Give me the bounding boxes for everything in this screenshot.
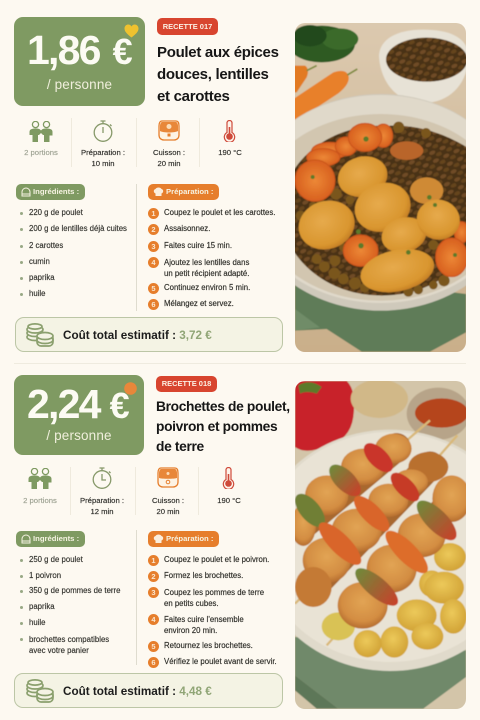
recipe title: et carottes [157, 88, 230, 105]
ingredient: 1 poivron [29, 571, 61, 580]
icon: air fryer [157, 467, 179, 488]
step 3 [148, 240, 232, 252]
step 3: Faites cuire 15 min. [164, 240, 232, 250]
step 4: un petit récipient adapté. [164, 268, 249, 278]
step 1 [148, 555, 282, 566]
ingredient: paprika [29, 602, 55, 611]
ingredient: cumin [29, 257, 50, 266]
ingredient: huile [29, 618, 45, 627]
ingredients heading [16, 184, 85, 200]
total cost text: Coût total estimatif : 4,48 € [63, 685, 212, 698]
herb flecks [311, 136, 457, 257]
recipe title: Brochettes de poulet, [156, 399, 290, 414]
step 4: Ajoutez les lentilles dans [164, 258, 249, 266]
stat: preparation: Préparation : [81, 148, 125, 157]
skewer sticks [295, 420, 457, 645]
ingredient [29, 635, 109, 655]
total cost bar [14, 673, 283, 708]
recipe title: Poulet aux épices [157, 44, 279, 61]
stats row [24, 118, 242, 168]
parsley [288, 25, 358, 62]
step 6 [148, 298, 234, 310]
recipe title: poivron et pommes [156, 419, 277, 434]
stat: cooking [153, 148, 185, 168]
step 5: Continuez environ 5 min. [164, 282, 250, 292]
preparation panel [148, 184, 275, 310]
step 6 [148, 657, 282, 668]
preparation panel [148, 531, 277, 668]
step 3: 3 [151, 588, 156, 597]
stat: portions: 2 portions [24, 148, 58, 157]
recipe title [157, 44, 279, 105]
skewer shadow bands [303, 447, 453, 605]
step 6: 6 [151, 658, 156, 667]
step 4 [148, 257, 250, 278]
napkin [295, 272, 466, 352]
step 2: Assaisonnez. [164, 224, 210, 233]
step 2: 2 [151, 572, 156, 581]
small lentil bowl [379, 30, 468, 103]
price unit: / personne [47, 77, 112, 92]
stat: cooking: 20 min [156, 506, 180, 516]
potato [351, 379, 408, 418]
plate [257, 430, 480, 671]
icon: coins [26, 679, 54, 703]
step 3: Coupez les pommes de terre [164, 588, 264, 597]
icon: air fryer [158, 120, 180, 141]
ingredients panel [16, 531, 120, 655]
step 1: Coupez le poulet et le poivron. [164, 555, 269, 564]
chicken pieces [291, 434, 471, 629]
step 4: environ 20 min. [164, 626, 217, 635]
icon: orange dot [124, 382, 137, 395]
carrot slices [295, 123, 469, 277]
icon: heart [124, 24, 138, 38]
stat: cooking: Cuisson : [152, 496, 184, 504]
stat: cooking: Cuisson : [153, 148, 185, 157]
stat: preparation [81, 148, 125, 168]
napkin [295, 637, 466, 709]
step 6: 6 [151, 300, 156, 308]
stat: preparation: 10 min [91, 159, 115, 168]
bell pepper [295, 381, 354, 451]
price amount: 2,24 € [27, 381, 130, 427]
carrots [293, 66, 357, 123]
ingredient: paprika [29, 273, 55, 282]
step 6: Mélangez et servez. [164, 298, 234, 308]
step 2: 2 [151, 225, 156, 234]
icon: stopwatch [94, 120, 112, 142]
recipe badge: RECETTE 017 [163, 22, 212, 31]
icon: thermometer [222, 467, 234, 489]
icon: thermometer [224, 120, 236, 142]
step 6: Vérifiez le poulet avant de servir. [164, 657, 277, 666]
ingredient: 250 g de poulet [29, 555, 83, 564]
stats row [23, 467, 241, 516]
step 4: Faites cuire l’ensemble [164, 615, 244, 624]
step 5 [148, 641, 282, 652]
price unit: / personne [46, 428, 112, 443]
recipe badge: RECETTE 018 [162, 379, 211, 388]
recipe title [156, 399, 290, 454]
recipe 017 panel [14, 17, 466, 352]
step 5: 5 [151, 284, 156, 292]
ingredients heading [16, 531, 85, 547]
stat: preparation: 12 min [90, 506, 114, 516]
potatoes [322, 543, 467, 658]
preparation heading: Préparation : [166, 534, 213, 543]
recipe title: de terre [156, 439, 204, 454]
recipe 018 panel [14, 375, 466, 709]
ingredient: 2 carottes [29, 241, 63, 250]
step 1: 1 [151, 556, 156, 565]
icon: stopwatch [92, 467, 112, 489]
price card [14, 375, 144, 455]
step 5: 5 [151, 642, 156, 651]
icon: chef hat [154, 534, 164, 543]
chicken pieces [292, 141, 464, 299]
ingredients heading: Ingrédients : [33, 187, 79, 196]
preparation heading [148, 531, 219, 547]
step 4: 4 [151, 615, 156, 624]
step 3: en petits cubes. [164, 599, 219, 608]
ingredient: 200 g de lentilles déjà cuites [29, 224, 127, 233]
photo: chicken and pepper skewers with potatoes [295, 381, 466, 709]
ingredient: huile [29, 289, 45, 298]
ingredient: 220 g de poulet [29, 208, 83, 217]
stat: cooking: 20 min [157, 159, 181, 168]
step 3 [148, 587, 282, 609]
ingredient: avec votre panier [29, 646, 89, 655]
step 5 [148, 282, 250, 294]
ingredient: 350 g de pommes de terre [29, 586, 120, 595]
stat: temperature: 190 °C [218, 148, 242, 157]
lentils [282, 126, 480, 296]
ingredient: brochettes compatibles [29, 635, 109, 644]
stat: cooking [152, 496, 184, 516]
skewer peppers [289, 438, 463, 612]
step 2 [148, 571, 282, 582]
icon: coins [26, 323, 54, 347]
step 2: Formez les brochettes. [164, 571, 243, 580]
total cost bar [15, 317, 283, 352]
icon: two people [28, 468, 52, 489]
step 4: 4 [151, 258, 156, 266]
price amount: 1,86 € [27, 27, 133, 73]
price card [14, 17, 145, 106]
recipe title: douces, lentilles [157, 66, 269, 83]
ingredients panel [16, 184, 127, 298]
stat: preparation [80, 496, 124, 516]
stat: portions: 2 portions [23, 496, 57, 504]
step 3: 3 [151, 242, 156, 250]
preparation heading: Préparation : [166, 187, 213, 196]
step 1: 1 [151, 209, 156, 218]
ingredients heading: Ingrédients : [33, 534, 79, 543]
step 5: Retournez les brochettes. [164, 641, 253, 650]
photo: chicken, lentils and carrots [295, 23, 466, 352]
stat: temperature: 190 °C [217, 496, 241, 504]
step 1: Coupez le poulet et les carottes. [164, 208, 275, 217]
serving bowl [247, 94, 480, 311]
step 4 [148, 614, 282, 636]
recipe badge [157, 18, 218, 35]
step 2 [148, 224, 210, 235]
icon: ingredient basket [22, 534, 30, 544]
preparation heading [148, 184, 219, 200]
paprika bowl [407, 388, 470, 440]
recipe badge [156, 376, 217, 392]
stat: preparation: Préparation : [80, 496, 124, 504]
icon: chef hat [154, 188, 164, 196]
icon: ingredient basket [22, 188, 30, 196]
icon: two people [30, 121, 52, 142]
total cost text: Coût total estimatif : 3,72 € [63, 329, 212, 342]
